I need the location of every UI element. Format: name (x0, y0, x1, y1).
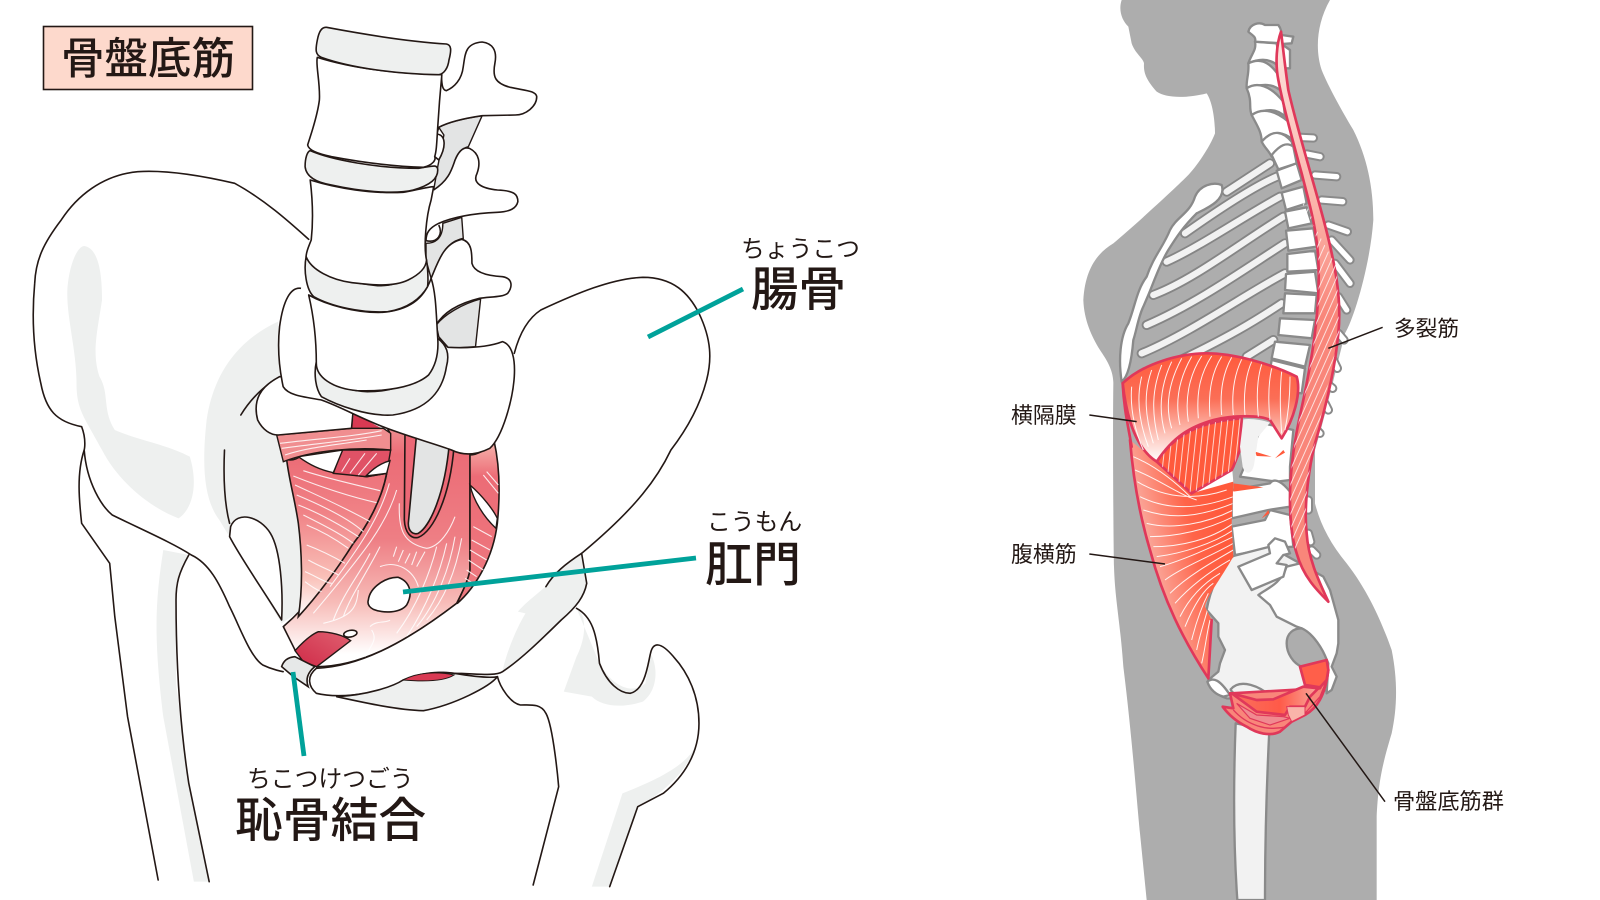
right femur shading (564, 608, 696, 887)
spinous processes (1298, 137, 1350, 555)
leader: anus (403, 558, 696, 592)
vertebra 3 (309, 278, 438, 391)
sacrum lower lobe (256, 377, 353, 435)
central tendon (1240, 419, 1270, 473)
ligament: upper (434, 116, 482, 190)
sacrum white (1258, 563, 1338, 693)
left ilium shading (67, 246, 194, 518)
panel: pelvis front illustration (33, 27, 710, 887)
label: ilium: ちょうこつ (741, 236, 860, 263)
label: diaphragm: 横隔膜 (1011, 403, 1077, 428)
left levator (287, 457, 387, 617)
sacral block (1238, 538, 1290, 590)
rectum outer (404, 430, 454, 538)
ramus shading (503, 553, 587, 672)
diaphragm dome (1123, 353, 1298, 462)
label: transversus abdominis: 腹横筋 (1011, 542, 1077, 567)
dark muscle wedge (352, 413, 382, 428)
left femur shading (157, 550, 209, 882)
red lens (403, 673, 454, 681)
disc 3 (305, 257, 428, 312)
transversus abdominis (1130, 440, 1233, 678)
rectum inner (408, 433, 449, 534)
right femur contour (497, 608, 699, 887)
leader: ilium (648, 289, 743, 337)
right white opening (366, 461, 390, 476)
panel: side body illustration (1083, 0, 1396, 900)
band fibres (280, 431, 382, 455)
gap between muscles (1192, 471, 1233, 493)
ligament: lower (436, 299, 481, 348)
pelvis back layer (33, 171, 710, 887)
obturator foramen (230, 517, 282, 620)
right levator (457, 441, 499, 604)
title box: 骨盤底筋 (61, 36, 235, 84)
anus opening (368, 577, 410, 612)
small urethral opening (343, 629, 357, 638)
spinous process 2 (426, 148, 518, 241)
right slit (470, 485, 497, 528)
label: pubic symphysis: 恥骨結合 (235, 795, 426, 848)
lumbar spine (1232, 423, 1293, 555)
label: ilium: 腸骨 (751, 264, 846, 317)
multifidus (1277, 32, 1339, 602)
disc 2 (305, 151, 438, 192)
label: anus: こうもん (707, 509, 802, 536)
spinous process 1 (434, 42, 537, 160)
label: anus (705, 509, 802, 592)
label: pubic symphysis (235, 766, 426, 848)
diaphragm crus (1157, 418, 1242, 493)
left hip contour (84, 450, 283, 672)
pelvic floor muscles (1223, 660, 1328, 734)
spinous process 3 (431, 239, 511, 325)
central levator (283, 420, 470, 667)
disc 1 (316, 27, 451, 75)
acetabulum (1231, 684, 1274, 699)
muscle fibres (293, 471, 498, 657)
label: multifidus: 多裂筋 (1394, 316, 1459, 341)
leader: pubic symphysis (293, 672, 304, 756)
left ilium outline (33, 171, 309, 880)
body silhouette (1083, 0, 1396, 900)
pelvic inner edge (224, 377, 280, 523)
thoracic spine (1267, 144, 1318, 393)
cervical spine (1247, 23, 1293, 157)
leader: pelvic floor (1306, 693, 1385, 802)
label: pubic symphysis: ちこつけつごう (247, 766, 414, 793)
title box (44, 26, 252, 90)
femur (1234, 723, 1269, 900)
red fibres between vertebrae (1233, 450, 1285, 518)
central red muscle (333, 450, 391, 477)
sternum and costal cartilage (1120, 184, 1222, 382)
label: ilium (741, 236, 860, 317)
leader: multifidus (1328, 327, 1383, 348)
ribs (1142, 163, 1285, 367)
pelvis front layer (256, 27, 699, 887)
leader: transversus (1089, 554, 1165, 564)
leader: diaphragm (1089, 415, 1137, 422)
greater sciatic foramen (1287, 628, 1327, 667)
diaphragm lower rib edge (1123, 383, 1132, 447)
sacrum main (279, 288, 514, 454)
vaginal muscle (295, 632, 351, 667)
ramus contour (310, 553, 587, 696)
lower pubic arch (337, 672, 497, 711)
ligament: middle (426, 217, 463, 278)
disc 4 (315, 338, 448, 415)
vertebra 2 (306, 180, 434, 285)
pelvis (1207, 547, 1338, 700)
red muscle fibres (342, 453, 377, 475)
inner pelvis wall shading (204, 322, 306, 623)
label: pelvic floor muscle group: 骨盤底筋群 (1393, 789, 1504, 814)
ramus white body (310, 603, 536, 696)
right ilium outline (514, 277, 710, 553)
left white opening (298, 450, 343, 473)
left femur inner edge (176, 555, 209, 882)
pubic symphysis (282, 657, 315, 687)
pubic bone (1207, 679, 1230, 697)
pelvic floor muscle (277, 413, 499, 667)
top muscle band (277, 428, 391, 462)
vertebra 1 (308, 57, 442, 167)
label: anus: 肛門 (705, 539, 801, 592)
